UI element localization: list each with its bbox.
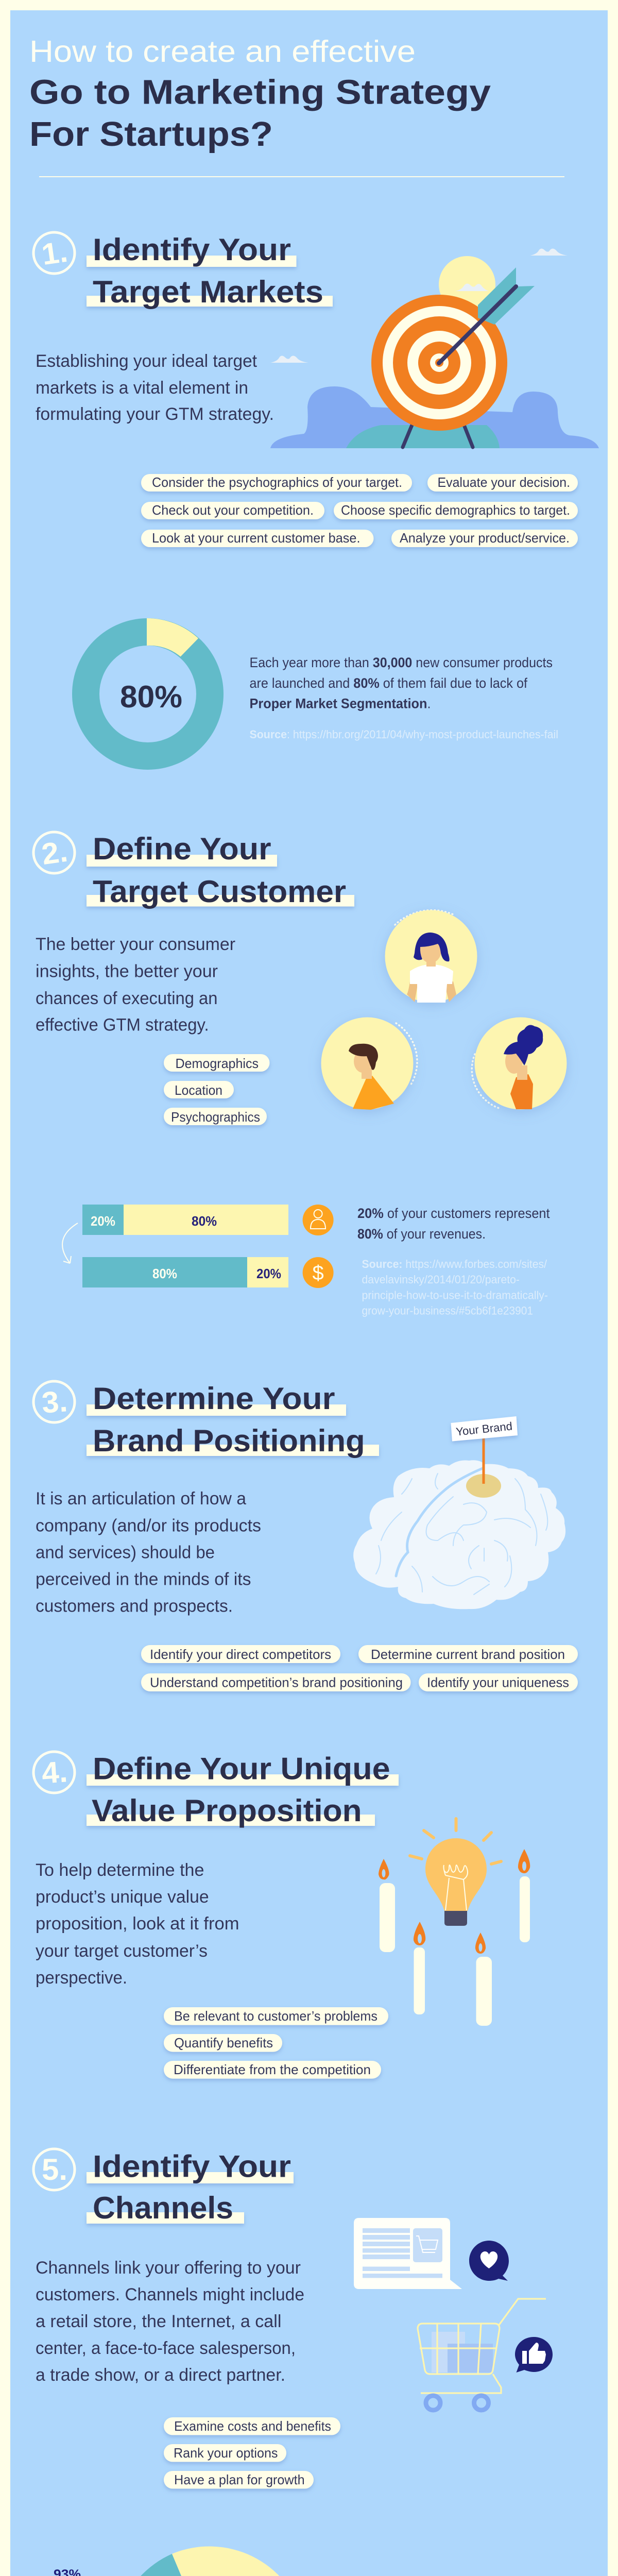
intro text 5 bbox=[36, 2258, 304, 2385]
heading 4: Define Your Unique bbox=[93, 1752, 390, 1786]
icon: brain with brand flag: Your Brand bbox=[455, 1419, 513, 1438]
title: For Startups? bbox=[29, 115, 273, 154]
intro text 1: Establishing your ideal target bbox=[36, 351, 258, 371]
pill: Understand competition’s brand positioning bbox=[150, 1674, 403, 1690]
pill: Be relevant to customer’s problems bbox=[174, 2008, 377, 2024]
intro text 2 bbox=[36, 935, 235, 1035]
pills: customer attributes bbox=[164, 1054, 270, 1125]
icon: dollar: $ bbox=[312, 1262, 324, 1284]
donut chart 80% bbox=[85, 618, 210, 756]
intro text 1: formulating your GTM strategy. bbox=[36, 404, 274, 424]
intro text 4: perspective. bbox=[36, 1968, 127, 1988]
intro text 1: markets is a vital element in bbox=[36, 378, 248, 398]
section 1: identify your target markets bbox=[33, 232, 599, 756]
source: forbes: Source: https://www.forbes.com/sites/ bbox=[362, 1258, 547, 1270]
intro text 3: perceived in the minds of its bbox=[36, 1569, 251, 1589]
number badge 5 bbox=[33, 2149, 75, 2190]
intro text 4: your target customer’s bbox=[36, 1941, 208, 1961]
pills: target market checklist bbox=[141, 474, 578, 547]
icon: woman with bun bbox=[472, 1017, 566, 1110]
stat text: product failure bbox=[249, 655, 558, 741]
intro text 2: chances of executing an bbox=[36, 989, 217, 1008]
arrow: curved from top bar to bottom bar bbox=[62, 1223, 78, 1263]
source: forbes: grow-your-business/#5cb6f1e23901 bbox=[362, 1304, 533, 1317]
icon: light bulb and candles bbox=[379, 1819, 530, 2026]
donut chart: channel usage bbox=[114, 2547, 306, 2576]
heading 4 bbox=[87, 1752, 399, 1828]
intro text 2: insights, the better your bbox=[36, 961, 218, 981]
heading 4: Value Proposition bbox=[92, 1793, 362, 1828]
intro text 3: customers and prospects. bbox=[36, 1597, 233, 1616]
intro text 2: effective GTM strategy. bbox=[36, 1015, 209, 1035]
section 3: determine your brand positioning bbox=[33, 1381, 578, 1691]
heading 5 bbox=[87, 2149, 294, 2225]
number badge 5: 5. bbox=[42, 2153, 67, 2187]
pill: Differentiate from the competition bbox=[174, 2062, 371, 2077]
heading 1: Target Markets bbox=[93, 275, 323, 309]
bar chart 20/80 bbox=[82, 1205, 288, 1287]
stat text: product failure: Each year more than 30,000 new consumer products bbox=[249, 655, 553, 670]
pill: Demographics bbox=[175, 1056, 259, 1071]
title: Go to Marketing Strategy bbox=[29, 73, 491, 111]
stat text: pareto: 20% of your customers represent bbox=[357, 1206, 550, 1221]
intro text 4: product’s unique value bbox=[36, 1887, 209, 1907]
stat text: pareto: 80% of your revenues. bbox=[357, 1226, 486, 1242]
heading 5: Identify Your bbox=[93, 2149, 291, 2183]
heading 3: Determine Your bbox=[93, 1381, 335, 1416]
pill: Evaluate your decision. bbox=[438, 474, 570, 490]
source: forbes: davelavinsky/2014/01/20/pareto- bbox=[362, 1273, 520, 1286]
bar chart 20/80: 20% bbox=[256, 1266, 281, 1281]
number badge 1 bbox=[33, 232, 75, 274]
pill: Look at your current customer base. bbox=[152, 530, 360, 546]
stat text: pareto bbox=[357, 1206, 550, 1242]
number badge 4 bbox=[33, 1752, 75, 1793]
number badge 3 bbox=[33, 1381, 75, 1422]
icon: man with brown hair bbox=[321, 1017, 417, 1110]
pill: Consider the psychographics of your target. bbox=[152, 474, 402, 490]
stat text: product failure: are launched and 80% of them fail due to lack of bbox=[249, 675, 527, 691]
donut chart 80%: 80% bbox=[120, 680, 182, 714]
icon: product listing screen bbox=[354, 2218, 462, 2289]
intro text 4: proposition, look at it from bbox=[36, 1914, 239, 1934]
bar chart 20/80: 80% bbox=[192, 1213, 217, 1229]
heading 1 bbox=[87, 232, 333, 309]
pill: Psychographics bbox=[171, 1109, 260, 1125]
section 5: identify your channels bbox=[33, 2149, 585, 2576]
intro text 5: a retail store, the Internet, a call bbox=[36, 2312, 281, 2331]
number badge 2: 2. bbox=[40, 835, 70, 871]
pill: Quantify benefits bbox=[174, 2035, 273, 2050]
intro text 5: center, a face-to-face salesperson, bbox=[36, 2338, 296, 2358]
pills: positioning checklist bbox=[141, 1645, 578, 1691]
icon: customer bbox=[303, 1205, 334, 1235]
intro text 3 bbox=[36, 1489, 261, 1616]
heading 2 bbox=[87, 832, 354, 909]
source: forbes: principle-how-to-use-it-to-dramatically- bbox=[362, 1289, 548, 1302]
section 4: define your unique value proposition bbox=[33, 1752, 530, 2079]
icon: heart bubble bbox=[469, 2241, 509, 2281]
pill: Determine current brand position bbox=[371, 1647, 565, 1662]
intro text 4: To help determine the bbox=[36, 1860, 204, 1880]
pill: Analyze your product/service. bbox=[400, 530, 570, 546]
stat text: product failure: Proper Market Segmentation. bbox=[249, 696, 431, 711]
icon: target with arrow bbox=[270, 248, 599, 448]
intro text 5: Channels link your offering to your bbox=[36, 2258, 301, 2278]
intro text 3: It is an articulation of how a bbox=[36, 1489, 246, 1509]
pill: Identify your direct competitors bbox=[150, 1647, 331, 1662]
icon: thumbs up bubble bbox=[515, 2337, 553, 2372]
icon: woman in white shirt bbox=[385, 910, 477, 1003]
icon: shopping cart bbox=[418, 2299, 546, 2410]
pill: Choose specific demographics to target. bbox=[341, 502, 570, 518]
icon: dollar bbox=[303, 1257, 334, 1288]
pills: channel steps bbox=[164, 2417, 340, 2488]
intro text 3: and services) should be bbox=[36, 1543, 215, 1562]
number badge 2 bbox=[33, 832, 75, 873]
pill bbox=[164, 1081, 234, 1098]
pill: Examine costs and benefits bbox=[174, 2418, 331, 2434]
pill: Check out your competition. bbox=[152, 502, 314, 518]
pill: Have a plan for growth bbox=[174, 2472, 305, 2487]
pill: Identify your uniqueness bbox=[427, 1674, 569, 1690]
number badge 4: 4. bbox=[41, 1755, 68, 1790]
heading 2: Define Your bbox=[93, 832, 271, 866]
bar chart 20/80: 20% bbox=[91, 1213, 115, 1229]
intro text 5: a trade show, or a direct partner. bbox=[36, 2365, 285, 2385]
title bbox=[29, 35, 491, 154]
bar chart 20/80: 80% bbox=[152, 1266, 177, 1281]
intro text 1 bbox=[36, 351, 274, 424]
heading 1: Identify Your bbox=[93, 232, 291, 267]
stat text: product failure: Source: https://hbr.org/2011/04/why-most-product-launches-fail bbox=[249, 728, 558, 741]
intro text 5: customers. Channels might include bbox=[36, 2285, 304, 2304]
pill: Rank your options bbox=[174, 2445, 278, 2461]
number badge 1: 1. bbox=[40, 235, 70, 272]
pills: value proposition bbox=[164, 2007, 388, 2079]
heading 2: Target Customer bbox=[93, 874, 346, 909]
pill: Location bbox=[175, 1082, 222, 1098]
intro text 4 bbox=[36, 1860, 239, 1988]
heading 3: Brand Positioning bbox=[93, 1423, 365, 1458]
title: How to create an effective bbox=[29, 35, 416, 69]
source: forbes bbox=[362, 1258, 548, 1317]
heading 5: Channels bbox=[93, 2191, 233, 2225]
intro text 2: The better your consumer bbox=[36, 935, 235, 954]
number badge 3: 3. bbox=[41, 1384, 68, 1420]
intro text 3: company (and/or its products bbox=[36, 1516, 261, 1535]
icon: brain with brand flag bbox=[353, 1416, 565, 1609]
heading 3 bbox=[87, 1381, 379, 1458]
section 2: define your target customer bbox=[33, 832, 566, 1317]
